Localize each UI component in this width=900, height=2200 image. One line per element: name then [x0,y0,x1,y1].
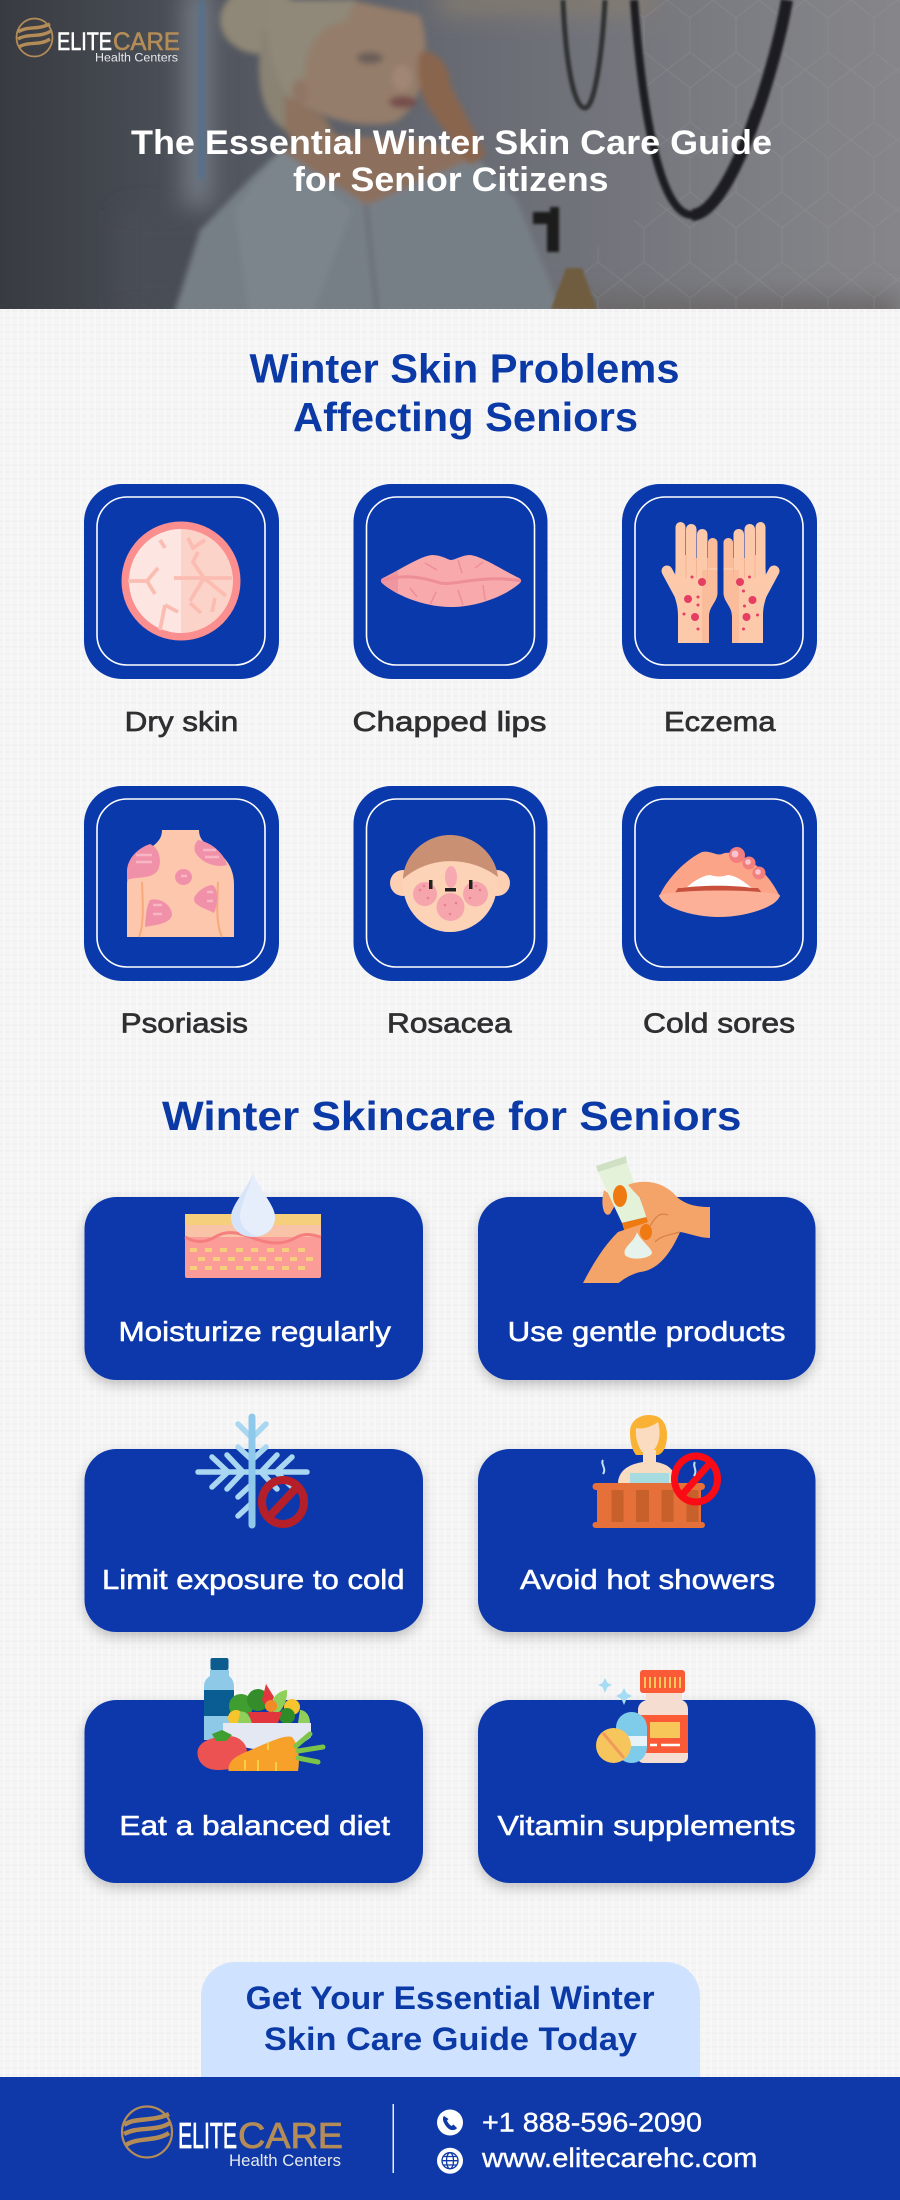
label: Moisturize regularly [118,1316,391,1347]
footer logo [122,2106,343,2170]
panel: avoid hot showers [478,1415,816,1632]
label: cold sores: Cold sores [643,1008,795,1039]
label: Eat a balanced diet [119,1810,390,1841]
contact: website: www.elitecarehc.com [481,2143,758,2173]
footer band [0,2077,900,2200]
icon: hand with tube [583,1156,710,1283]
header logo: CARE [113,28,180,56]
label: Vitamin supplements [498,1810,796,1841]
icon: phone [437,2110,463,2136]
header logo: ELITE [57,28,112,56]
heading: winter skin problems: Affecting Seniors [293,394,638,440]
title: for Senior Citizens [293,161,608,199]
label: psoriasis: Psoriasis [121,1008,248,1039]
label: dry skin: Dry skin [125,706,238,737]
icon: vitamin bottle and pills [596,1670,688,1763]
callout: call to action [201,1962,700,2077]
icon: chapped lips [380,555,522,607]
label: Avoid hot showers [520,1564,775,1595]
panel: vitamin supplements [478,1670,816,1883]
icon: rosacea face [390,835,510,932]
panel: eat a balanced diet [84,1658,423,1883]
icon: psoriasis torso [127,830,234,937]
panel: psoriasis [84,786,279,981]
icon: dry skin [122,522,240,640]
header logo [16,18,180,64]
photo: robe [172,135,565,320]
icon: globe [437,2148,463,2174]
label: Use gentle products [508,1316,786,1347]
photo: mirrors and fixtures [533,0,787,309]
heading: winter skin problems: Winter Skin Problems [250,346,680,392]
panel: limit exposure to cold [84,1417,423,1632]
header logo: Health Centers [95,52,178,64]
panel: rosacea [354,786,548,981]
title [131,129,771,192]
icon: skin with drop [185,1173,321,1278]
footer logo: ELITE [178,2115,237,2156]
panel: dry skin [84,484,279,679]
callout: call to action: Skin Care Guide Today [264,2021,637,2057]
label: Limit exposure to cold [102,1564,405,1595]
callout: call to action: Get Your Essential Winter [246,1980,655,2016]
header photo banner [0,0,900,326]
panel: moisturize regularly [84,1173,423,1380]
photo: wall and shelf [174,0,900,309]
photo: woman head and hand [220,0,486,165]
panel: eczema [622,484,817,679]
footer logo: CARE [238,2115,343,2156]
title: The Essential Winter Skin Care Guide [131,124,772,162]
label: chapped lips: Chapped lips [352,706,546,737]
icon: food bowl, bottle, tomato, carrot [197,1658,323,1771]
label: eczema: Eczema [664,706,776,737]
icon: snowflake with no sign [198,1417,307,1525]
label: rosacea: Rosacea [387,1008,512,1039]
heading: winter skin problems [250,346,680,440]
contact: phone number: +1 888-596-2090 [482,2108,702,2138]
panel: use gentle products [478,1156,816,1380]
icon: eczema hands [667,522,774,643]
footer logo: Health Centers [229,2152,341,2170]
icon: cold sore lips [659,847,780,917]
icon: hot tub with no sign [592,1415,718,1528]
panel: chapped lips [354,484,548,679]
heading: winter skincare: Winter Skincare for Seniors [162,1093,742,1139]
panel: cold sores [622,786,817,981]
